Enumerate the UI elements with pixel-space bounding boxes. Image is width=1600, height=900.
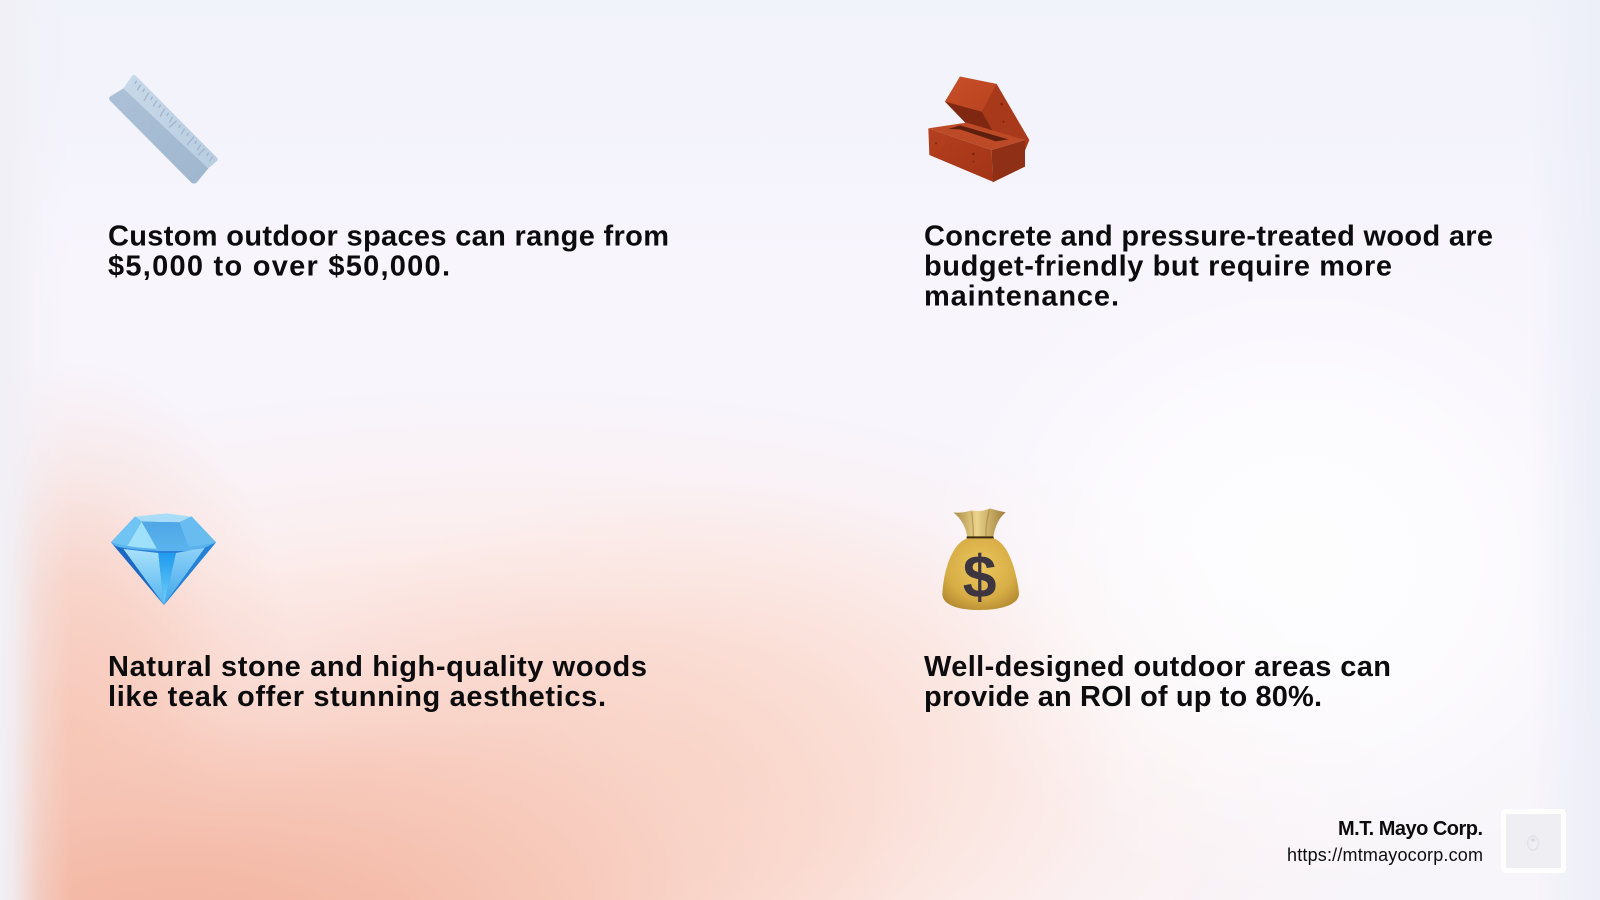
icon: brick: [928, 77, 1029, 182]
icon: money bag: $: [963, 543, 997, 611]
footer: company name and url: https://mtmayocorp.com: [1287, 845, 1483, 865]
text: concrete and wood: maintenance.: [924, 280, 1119, 312]
text: custom outdoor spaces: $5,000 to over $50,000.: [108, 250, 450, 282]
text: concrete and wood: budget-friendly but require more: [924, 250, 1392, 282]
text: return on investment: provide an ROI of up to 80%.: [924, 681, 1322, 713]
icon: ruler: [109, 75, 218, 184]
footer: company name and url: [1287, 818, 1483, 865]
text: natural stone: [108, 651, 647, 713]
text: natural stone: like teak offer stunning aesthetics.: [108, 681, 606, 713]
footer: company name and url: M.T. Mayo Corp.: [1338, 818, 1483, 840]
icon: money bag: [942, 508, 1019, 611]
text: return on investment: [924, 651, 1391, 713]
text: custom outdoor spaces: [108, 220, 669, 282]
footer: logo box: [1504, 812, 1564, 870]
icon: diamond: [111, 513, 216, 605]
text: natural stone: Natural stone and high-quality woods: [108, 651, 647, 683]
text: return on investment: Well-designed outdoor areas can: [924, 651, 1391, 683]
text: concrete and wood: [924, 220, 1493, 312]
text: concrete and wood: Concrete and pressure-treated wood are: [924, 220, 1493, 252]
text: custom outdoor spaces: Custom outdoor spaces can range from: [108, 220, 669, 252]
